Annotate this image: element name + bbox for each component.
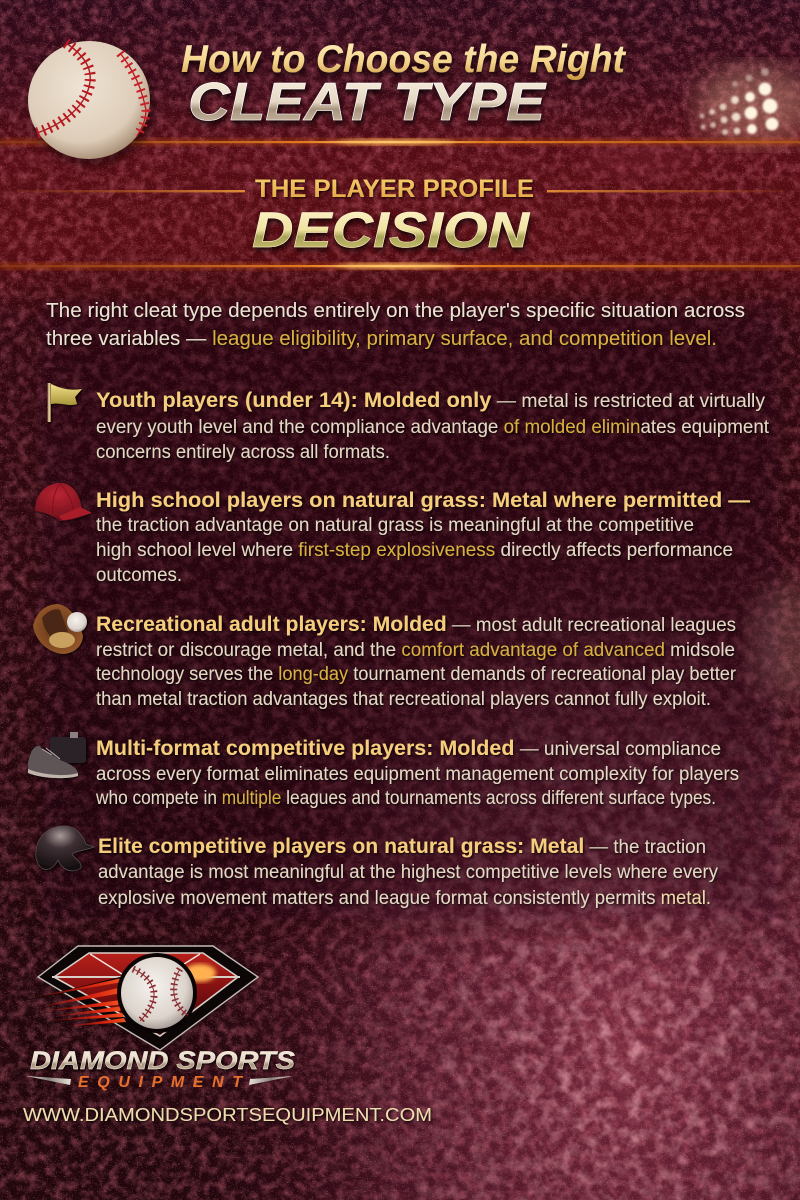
logo wordmark: DIAMOND SPORTS bbox=[30, 1047, 295, 1075]
baseball bbox=[22, 35, 156, 165]
subtitle line 2: DECISION bbox=[252, 202, 530, 258]
text: high school players: high school level where first-step explosiveness directly affects performance bbox=[96, 540, 733, 561]
header rule top bbox=[0, 138, 800, 146]
text: elite competitive players: advantage is most meaningful at the highest competitive levels where every bbox=[98, 862, 718, 883]
logo tagline: EQUIPMENT bbox=[78, 1074, 243, 1091]
logo diamond bbox=[38, 946, 258, 1050]
text: recreational adult players: restrict or discourage metal, and the comfort advantage of advanced midsole bbox=[96, 640, 735, 661]
panel: multi-format competitive players bbox=[28, 732, 739, 809]
panel: recreational adult players bbox=[33, 604, 737, 710]
logo speed streaks bbox=[18, 976, 126, 1027]
text: recreational adult players bbox=[96, 612, 737, 710]
website url: WWW.DIAMONDSPORTSEQUIPMENT.COM bbox=[23, 1105, 432, 1125]
text: elite competitive players: explosive movement matters and league format consistently permits metal. bbox=[98, 888, 711, 909]
text: youth players: every youth level and the compliance advantage of molded eliminates equipment bbox=[96, 417, 770, 438]
subtitle bbox=[17, 175, 785, 258]
text: multi-format competitive players: across every format eliminates equipment management complexity for players bbox=[96, 764, 739, 785]
text: recreational adult players: Recreational adult players: Molded — most adult recreational leagues bbox=[96, 612, 736, 636]
text: recreational adult players: than metal traction advantages that recreational players cannot fully exploit. bbox=[96, 689, 711, 710]
icon: glove and ball bbox=[33, 604, 87, 654]
subtitle line 1: THE PLAYER PROFILE bbox=[255, 175, 534, 203]
text: multi-format competitive players bbox=[95, 736, 739, 809]
logo baseball bbox=[117, 953, 197, 1033]
text: multi-format competitive players: who compete in multiple leagues and tournaments across different surface types. bbox=[95, 788, 716, 809]
intro text bbox=[46, 300, 745, 350]
panel: youth players bbox=[48, 383, 770, 463]
intro text: The right cleat type depends entirely on the player's specific situation across bbox=[46, 300, 745, 322]
text: high school players: High school players on natural grass: Metal where permitted — bbox=[96, 488, 750, 512]
text: multi-format competitive players: Multi-format competitive players: Molded — universal compliance bbox=[96, 736, 721, 760]
stadium lights bbox=[695, 65, 800, 145]
text: high school players: outcomes. bbox=[96, 565, 182, 586]
icon: batting helmet bbox=[36, 826, 94, 871]
title line 2: CLEAT TYPE bbox=[188, 72, 547, 132]
logo: diamond sports equipment bbox=[18, 946, 295, 1091]
text: high school players: the traction advantage on natural grass is meaningful at the competitive bbox=[96, 515, 694, 536]
title line 1: How to Choose the Right bbox=[181, 38, 627, 81]
intro text: three variables — league eligibility, primary surface, and competition level. bbox=[46, 328, 717, 350]
text: elite competitive players: Elite competitive players on natural grass: Metal — the traction bbox=[98, 834, 706, 858]
icon: cap bbox=[35, 483, 92, 521]
text: elite competitive players bbox=[98, 834, 718, 909]
icon: cleat and bag bbox=[28, 732, 86, 778]
icon: flag bbox=[48, 383, 82, 422]
subtitle rules bbox=[17, 190, 785, 192]
text: recreational adult players: technology serves the long-day tournament demands of recreational play better bbox=[96, 664, 737, 685]
header rule bottom bbox=[0, 262, 800, 270]
title bbox=[181, 38, 627, 132]
text: youth players: concerns entirely across all formats. bbox=[96, 442, 390, 463]
text: youth players: Youth players (under 14): Molded only — metal is restricted at virtually bbox=[96, 388, 765, 412]
panel: high school players bbox=[35, 483, 750, 586]
logo tagline bbox=[26, 1074, 293, 1091]
panel: elite competitive players bbox=[36, 826, 718, 909]
text: high school players bbox=[96, 488, 750, 586]
text: youth players bbox=[96, 388, 770, 463]
